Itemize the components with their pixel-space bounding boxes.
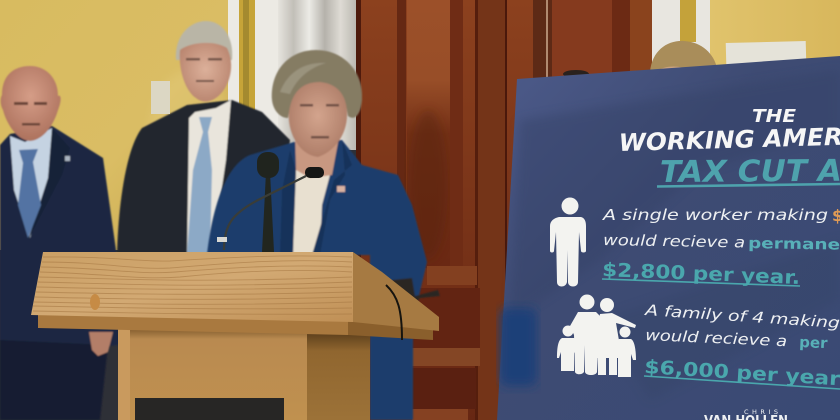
mother bbox=[592, 313, 636, 375]
icon: single worker bbox=[550, 198, 586, 286]
background: right wall and trim bbox=[652, 0, 840, 70]
suit bbox=[0, 126, 120, 352]
poster board bbox=[497, 56, 840, 420]
blouse bbox=[292, 170, 330, 255]
text: family: A family of 4 making bbox=[643, 301, 840, 332]
amount: $2,800 per year: $2,800 per year. bbox=[602, 259, 801, 289]
text: family bbox=[643, 301, 840, 352]
head bbox=[289, 82, 347, 157]
person: woman at the podium bbox=[207, 50, 440, 420]
heading: THE bbox=[752, 106, 797, 127]
text: family: per bbox=[799, 333, 828, 352]
sponsor logo bbox=[704, 408, 788, 420]
scuff bbox=[90, 294, 100, 310]
hand with clip bbox=[393, 286, 410, 294]
amount: $6,000 per year: $6,000 per year bbox=[644, 356, 840, 390]
text: single worker: permane bbox=[748, 234, 840, 254]
person: man in the middle bbox=[117, 21, 290, 255]
podium base bbox=[118, 328, 370, 420]
heading underline bbox=[657, 184, 840, 186]
trousers bbox=[0, 340, 108, 420]
text: single worker: would recieve a bbox=[603, 231, 745, 251]
father bbox=[570, 312, 600, 375]
girl bbox=[613, 339, 636, 377]
sloped top bbox=[31, 252, 353, 322]
black plate bbox=[135, 398, 284, 420]
heading: WORKING AMER bbox=[618, 123, 840, 157]
microphones bbox=[217, 152, 324, 252]
lower band bbox=[38, 312, 350, 335]
banknote texture bbox=[510, 70, 840, 320]
icon: family of four bbox=[557, 294, 636, 377]
lapel shadow bbox=[280, 140, 352, 255]
head bbox=[180, 43, 231, 102]
tie bbox=[18, 149, 41, 238]
wall switch plate bbox=[151, 81, 170, 114]
shirt bbox=[187, 100, 231, 255]
face features bbox=[14, 102, 47, 126]
poster bbox=[497, 56, 840, 420]
head bbox=[1, 66, 61, 141]
text: family: would recieve a bbox=[645, 326, 787, 350]
slanted side bbox=[353, 252, 439, 331]
boy bbox=[557, 338, 579, 371]
background: white trim and gold stripe bbox=[228, 0, 358, 150]
person: man on the left bbox=[0, 66, 120, 420]
tie bbox=[187, 117, 212, 255]
lapel bbox=[28, 128, 70, 240]
hair bbox=[176, 21, 232, 60]
wood grain bbox=[33, 256, 352, 314]
suit bbox=[117, 100, 290, 255]
jacket bbox=[207, 140, 427, 420]
sponsor logo: CHRIS bbox=[744, 408, 782, 416]
hair bbox=[272, 50, 362, 118]
podium bbox=[31, 252, 439, 420]
background: yellow damask wall bbox=[0, 0, 232, 260]
hair highlight bbox=[280, 63, 326, 94]
neck bbox=[295, 132, 340, 178]
background: floor-level shadow behind the podium bbox=[0, 250, 420, 420]
text: single worker bbox=[602, 206, 840, 254]
shirt bbox=[10, 128, 52, 238]
glare: blue reflection bbox=[500, 308, 537, 386]
cable bbox=[386, 285, 402, 340]
heading: TAX CUT A bbox=[660, 154, 840, 190]
hand bbox=[89, 332, 113, 356]
background: wooden door bbox=[356, 0, 652, 420]
text: single worker: A single worker making bbox=[602, 206, 828, 224]
flag pin bbox=[337, 186, 345, 192]
lapel pin bbox=[65, 156, 70, 161]
person behind poster: blonde hair bbox=[563, 41, 717, 78]
heading bbox=[618, 106, 840, 190]
